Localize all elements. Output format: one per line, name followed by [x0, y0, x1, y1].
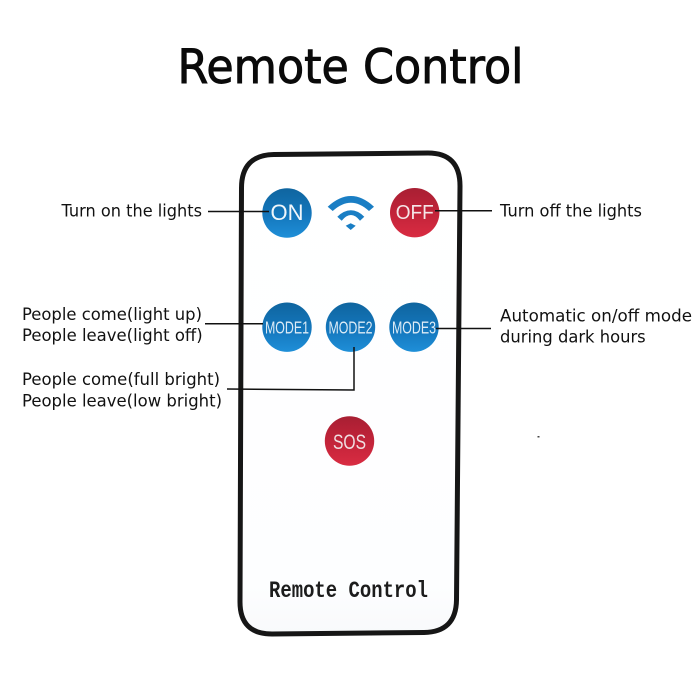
arrow: turn on connector [208, 210, 269, 212]
button: MODE2: MODE2 [328, 317, 372, 337]
button: ON: ON [270, 200, 304, 225]
remote control body [240, 153, 460, 634]
label: mode2: People leave(low bright) [22, 392, 222, 412]
arrow: turn off connector [435, 210, 492, 212]
label: mode1: People come(light up) [22, 305, 202, 325]
arrow: mode1 connector [205, 323, 263, 325]
button: ON [262, 188, 312, 238]
button: MODE1 [262, 302, 312, 352]
label: turn off: Turn off the lights [499, 202, 642, 222]
label: mode3: during dark hours [500, 328, 646, 348]
label: mode2: People come(full bright) [22, 370, 220, 390]
remote label: Remote Control [269, 578, 428, 604]
button: OFF [390, 188, 439, 237]
title: Remote Control [178, 40, 524, 95]
button: MODE3 [389, 302, 439, 352]
button: SOS: SOS [333, 431, 366, 454]
arrow: mode3 connector [436, 328, 491, 330]
icon: wifi signal [328, 196, 374, 230]
label: mode3 [500, 307, 692, 348]
label: turn on: Turn on the lights [61, 202, 202, 222]
label: mode1: People leave(light off) [22, 326, 203, 346]
button: MODE2 [326, 302, 375, 352]
button: SOS [325, 416, 374, 466]
label: mode2 [22, 370, 222, 412]
label: mode3: Automatic on/off mode [500, 307, 692, 327]
arrow: mode2 connector [227, 347, 354, 390]
label: mode1 [22, 305, 203, 346]
button: MODE3: MODE3 [392, 317, 436, 337]
button: OFF: OFF [396, 202, 434, 224]
button: MODE1: MODE1 [265, 317, 309, 337]
speck [538, 436, 540, 438]
